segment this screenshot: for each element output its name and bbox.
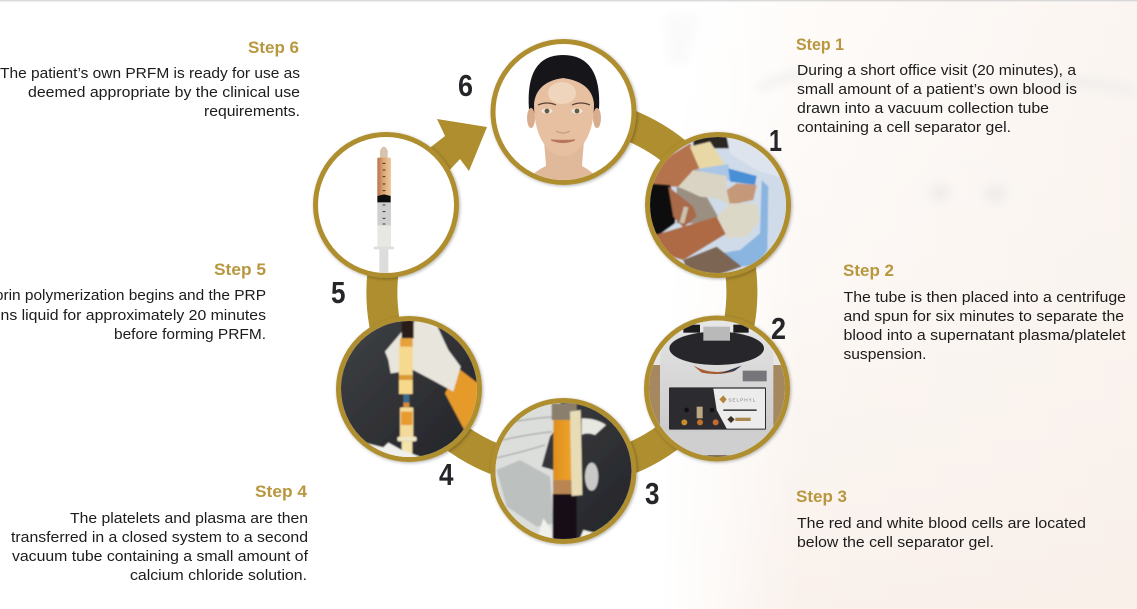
step numbers: 1 xyxy=(769,123,782,158)
step numbers xyxy=(331,68,786,511)
photo 1: blood draw xyxy=(645,132,792,280)
text block: step 4: calcium chloride solution. xyxy=(130,568,307,584)
text block: step 5: Step 5 xyxy=(214,261,266,279)
text block: step 3: The red and white blood cells are located xyxy=(797,516,1086,532)
text block: step 2: The tube is then placed into a centrifuge xyxy=(844,290,1126,306)
text block: step 3: Step 3 xyxy=(796,488,847,506)
text block: step 3 xyxy=(796,488,1086,551)
text block: step 1: containing a cell separator gel. xyxy=(797,120,1011,136)
photo 5: syringe xyxy=(316,134,456,276)
text block: step 4: transferred in a closed system to a second xyxy=(11,530,308,546)
text block: step 2: and spun for six minutes to separate the xyxy=(844,309,1124,325)
photo 2: centrifuge xyxy=(643,315,792,463)
text block: step 1: Step 1 xyxy=(796,36,844,54)
text block: step 5 xyxy=(0,261,266,343)
text block: step 4: Step 4 xyxy=(255,483,308,501)
text block: step 5: before forming PRFM. xyxy=(114,327,266,343)
text block: step 4 xyxy=(11,483,309,584)
photo 2: centrifuge: SELPHYL xyxy=(728,397,756,402)
step numbers: 3 xyxy=(645,476,660,511)
text block: step 6: The patient’s own PRFM is ready for use as xyxy=(0,66,300,82)
text block: step 1: small amount of a patient’s own blood is xyxy=(797,82,1077,98)
text block: step 1: drawn into a vacuum collection tube xyxy=(797,101,1049,117)
step numbers: 5 xyxy=(331,275,346,310)
step numbers: 2 xyxy=(771,311,786,346)
step numbers: 6 xyxy=(458,68,473,103)
text block: step 4: The platelets and plasma are then xyxy=(70,511,308,527)
photo 6: finished patient portrait xyxy=(493,42,634,184)
top edge line xyxy=(0,0,1137,3)
text block: step 2 xyxy=(843,262,1126,363)
photo 4: transfer between tubes xyxy=(338,318,480,463)
text block: step 1 xyxy=(796,36,1077,136)
text block: step 6: deemed appropriate by the clinical use xyxy=(28,85,300,101)
text block: step 2: suspension. xyxy=(844,347,926,363)
text block: step 2: blood into a supernatant plasma/platelet xyxy=(844,328,1126,344)
text block: step 6: requirements. xyxy=(204,104,300,120)
text block: step 6 xyxy=(0,39,300,120)
text block: step 4: vacuum tube containing a small amount of xyxy=(12,549,309,565)
photo 3: separated tube xyxy=(490,398,638,547)
step numbers: 4 xyxy=(439,457,454,492)
text block: step 6: Step 6 xyxy=(248,39,299,57)
text block: step 2: Step 2 xyxy=(843,262,894,280)
text block: step 1: During a short office visit (20 minutes), a xyxy=(797,63,1076,79)
gold progress ring xyxy=(382,112,742,472)
arrow into step 6 xyxy=(422,119,487,176)
background: faded face xyxy=(720,2,1137,609)
text block: step 3: below the cell separator gel. xyxy=(797,535,994,551)
